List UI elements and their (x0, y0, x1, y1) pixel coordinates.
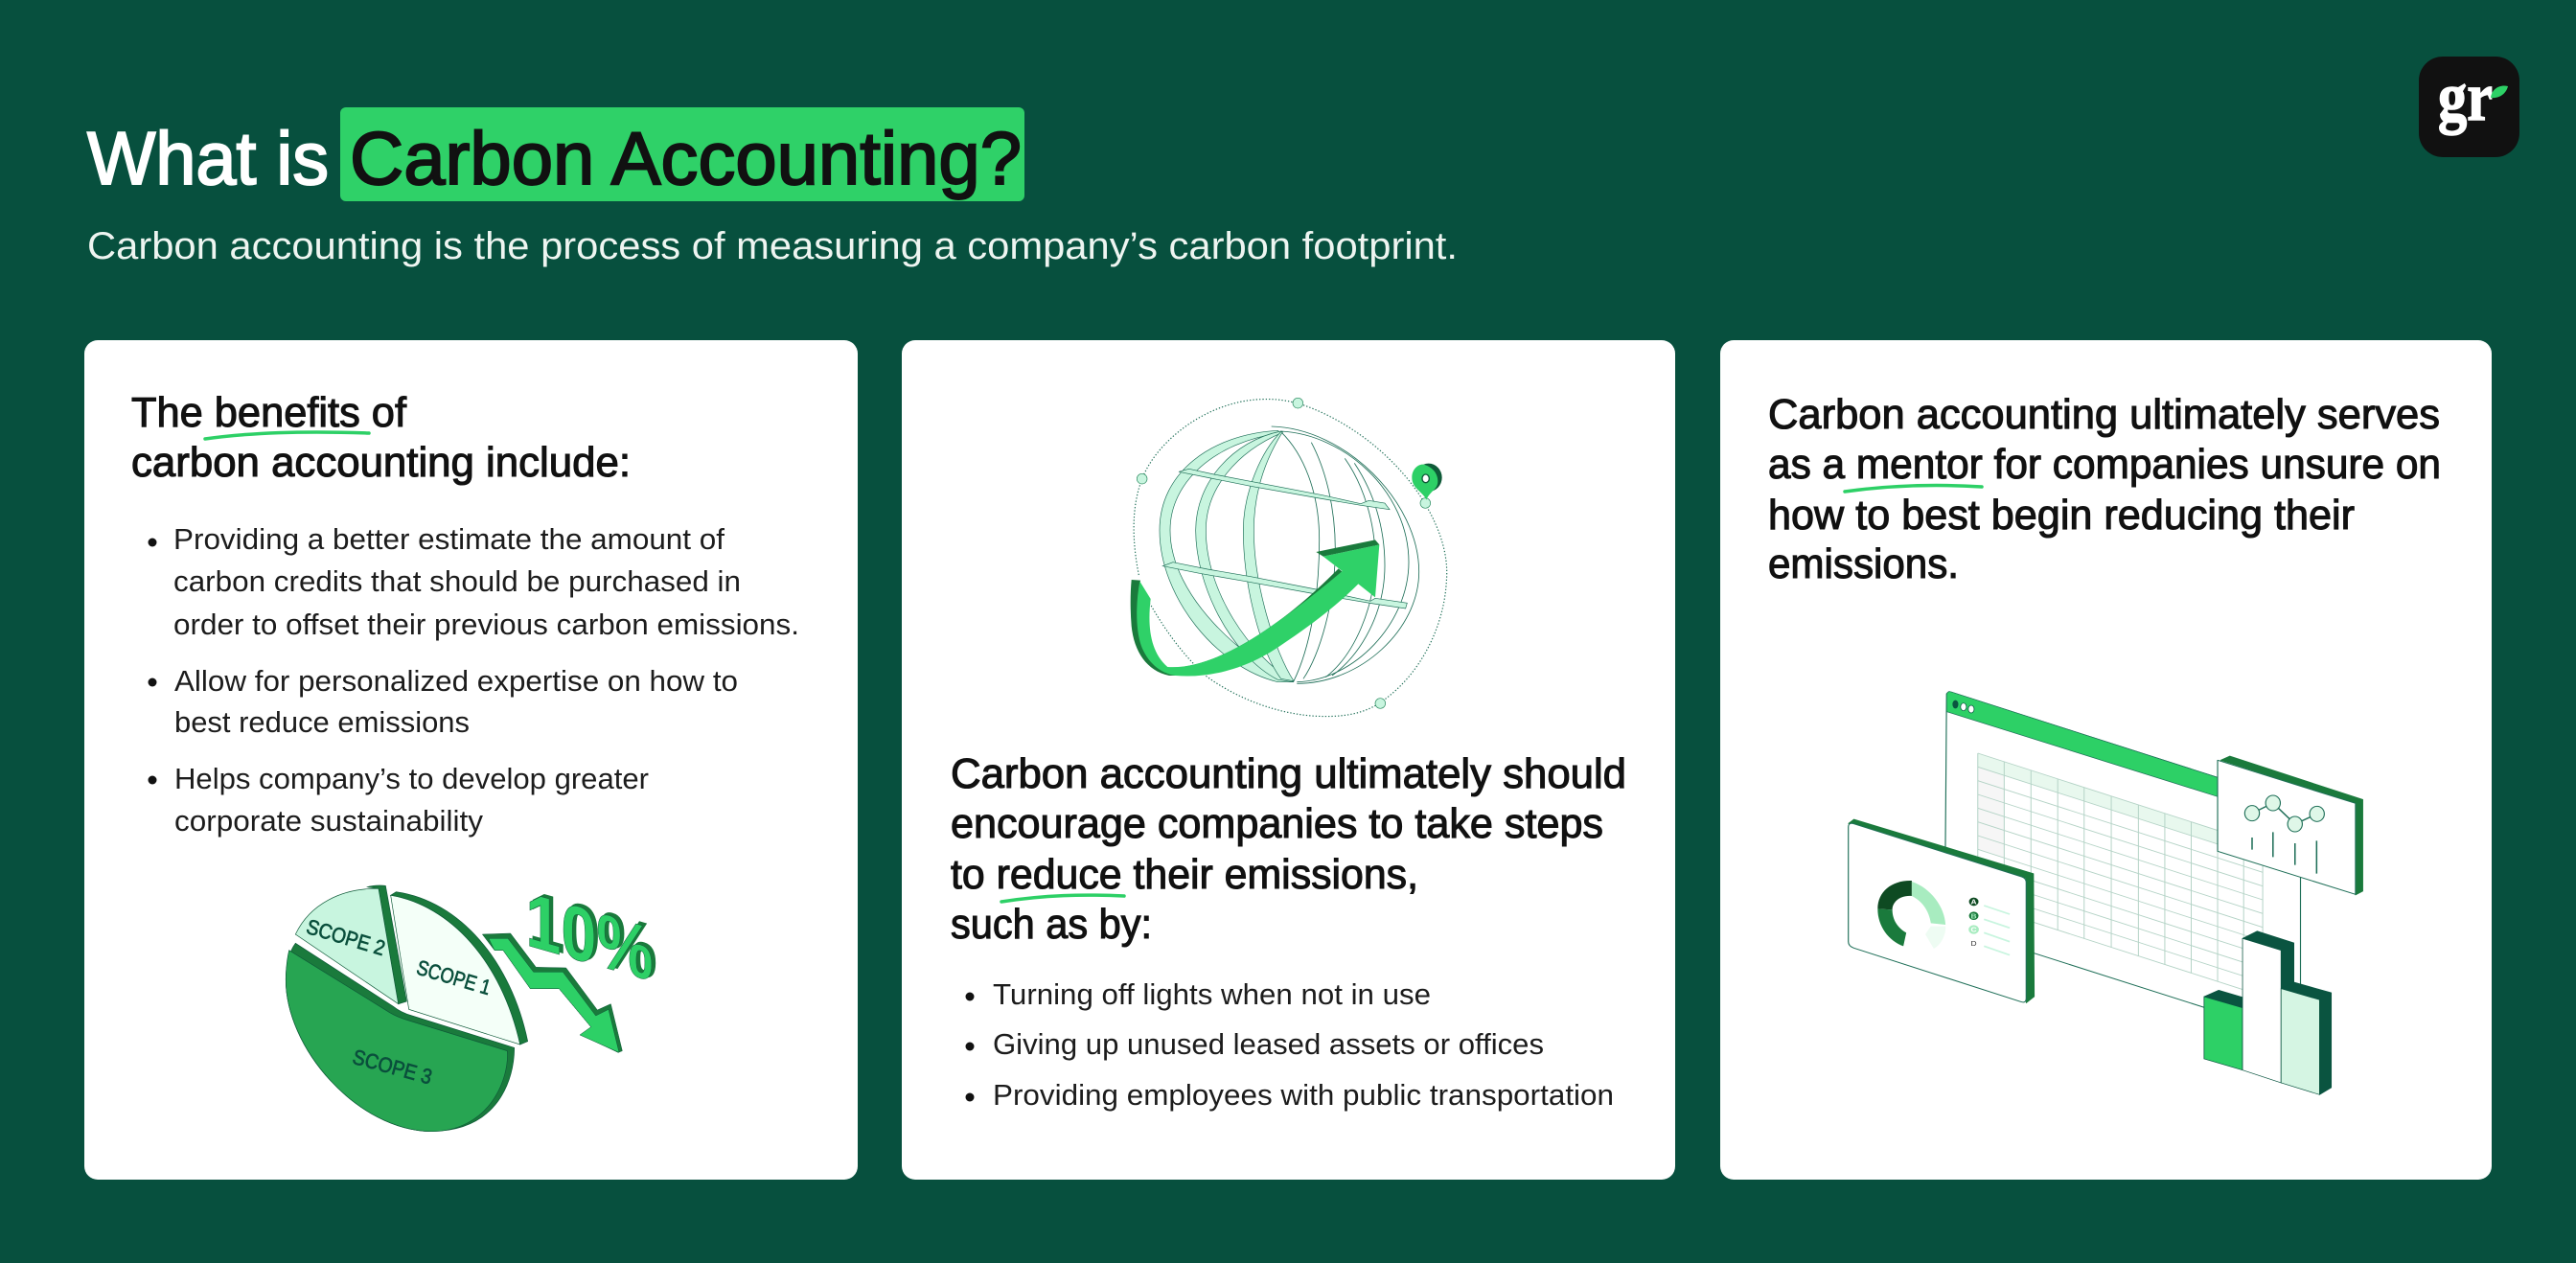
subtitle: Carbon accounting is the process of measuring a company’s carbon footprint. (87, 225, 1458, 267)
bullet list: steps: Giving up unused leased assets or offices (993, 1028, 1544, 1061)
heading: mentor: how to best begin reducing their (1768, 492, 2355, 539)
panel: reduce emissions (902, 340, 1675, 1180)
bullet list: benefits: best reduce emissions (174, 706, 470, 739)
spreadsheet window (1944, 692, 2301, 1038)
pie slice: scope 3 (286, 943, 515, 1132)
bullet list: benefits: Helps company’s to develop greater (174, 763, 649, 795)
icon: scope pie chart with 10% down arrow (286, 873, 656, 1132)
orbit dots (1137, 398, 1431, 708)
table (1978, 753, 2218, 844)
chart panel: donut: A (1971, 898, 1977, 907)
chart panel: line (2218, 756, 2363, 895)
bar chart (2204, 931, 2332, 1094)
chart panel: donut (1849, 819, 2035, 1003)
bullet list: benefits (148, 523, 799, 838)
heading: reduce (951, 750, 1626, 948)
icon: spreadsheet dashboard (1849, 692, 2363, 1094)
logo: gr (2438, 58, 2493, 135)
bullet list: benefits: Providing a better estimate the amount of (173, 523, 725, 556)
pie slice: scope 2 (295, 885, 406, 1004)
heading: benefits (131, 389, 631, 486)
title (87, 107, 1024, 201)
arrow: falling (482, 933, 622, 1052)
heading: benefits: The benefits of (131, 389, 407, 436)
heading: reduce: Carbon accounting ultimately should (951, 750, 1626, 797)
label: 10%: 10% (525, 876, 654, 999)
globe meridians (1272, 426, 1419, 683)
globe front bands (1160, 430, 1407, 682)
heading: mentor (1768, 391, 2441, 587)
bullet list: benefits: corporate sustainability (174, 805, 484, 838)
panel: benefits (84, 340, 858, 1180)
panel: mentor (1720, 340, 2492, 1180)
icon: globe with rising arrow (1131, 398, 1447, 717)
pie slice: scope 3: SCOPE 3 (350, 1045, 435, 1089)
arrow: rising (1131, 540, 1379, 677)
heading: mentor: emissions. (1768, 540, 1959, 587)
pie slice: scope 1: SCOPE 1 (414, 955, 494, 999)
map pin (1412, 464, 1442, 500)
logo (2419, 57, 2519, 157)
title: Carbon Accounting? (350, 116, 1022, 200)
heading: reduce: such as by: (951, 901, 1152, 948)
title: What is (87, 116, 329, 200)
label: 10%: 10% (529, 875, 656, 997)
heading: reduce: encourage companies to take steps (951, 800, 1603, 847)
chart panel: donut: D (1971, 939, 1977, 948)
pie slice: scope 2: SCOPE 2 (304, 914, 388, 960)
bullet list: steps: Providing employees with public transportation (993, 1079, 1614, 1112)
heading: mentor: as a mentor for companies unsure on (1768, 441, 2441, 488)
heading: mentor: Carbon accounting ultimately serves (1768, 391, 2440, 438)
bullet list: benefits: order to offset their previous carbon emissions. (173, 609, 799, 641)
heading: reduce: to reduce their emissions, (951, 851, 1418, 898)
heading: benefits: carbon accounting include: (131, 439, 631, 486)
bullet list: steps (966, 978, 1614, 1112)
pie slice: scope 1 (391, 892, 528, 1045)
chart panel: donut: C (1971, 926, 1977, 934)
bullet list: benefits: carbon credits that should be purchased in (173, 565, 741, 598)
chart panel: donut: B (1971, 912, 1977, 920)
bullet list: benefits: Allow for personalized expertise on how to (174, 665, 738, 698)
bullet list: steps: Turning off lights when not in use (993, 978, 1431, 1011)
orbit ring (1134, 400, 1447, 717)
